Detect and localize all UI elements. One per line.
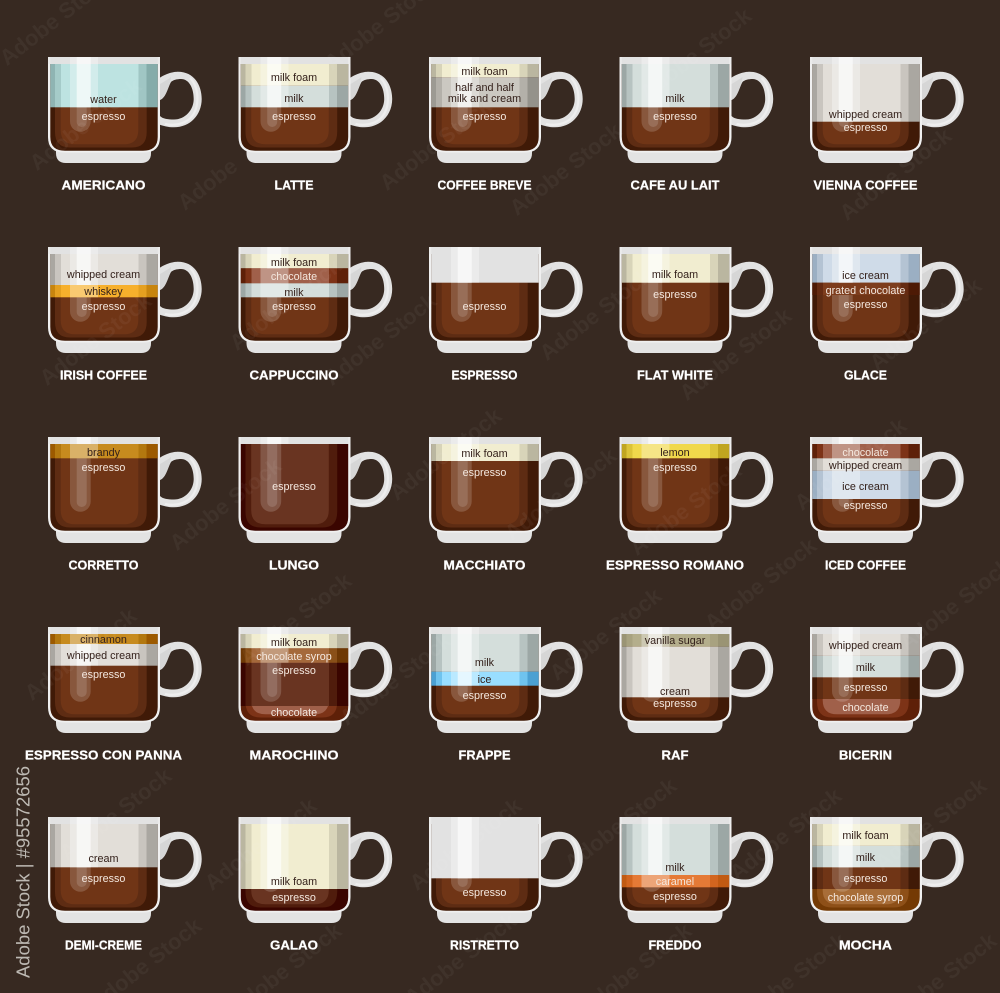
cup body	[238, 627, 392, 733]
drink: espresso	[429, 247, 583, 382]
drink: irish coffee	[48, 247, 202, 382]
stock watermarks: Adobe Stock	[55, 762, 177, 865]
stock watermarks: Adobe Stock	[375, 92, 497, 195]
stock watermarks: Adobe Stock	[385, 402, 507, 505]
layer labels: milk foam	[842, 830, 889, 842]
layer labels: chocolate	[271, 271, 317, 283]
layer labels: espresso	[463, 301, 506, 313]
glass highlight	[70, 437, 98, 458]
glass highlight	[260, 437, 288, 444]
drink: coffee breve	[429, 57, 583, 192]
cup body	[429, 817, 583, 923]
liquid layers	[431, 817, 539, 913]
drink: corretto	[48, 437, 202, 572]
liquid layers	[240, 247, 348, 343]
glass highlight	[451, 247, 479, 283]
layer labels: espresso	[272, 892, 316, 904]
layer labels: milk	[856, 662, 876, 674]
glass highlight	[832, 627, 860, 677]
layer labels: whipped cream	[828, 460, 902, 472]
layer labels: espresso	[844, 299, 887, 311]
layer labels: milk	[665, 93, 685, 105]
drink: frappe	[429, 627, 583, 762]
drink: ristretto	[429, 817, 583, 952]
glass highlight	[451, 57, 479, 107]
name: FRAPPE	[458, 748, 511, 762]
cup body	[238, 817, 392, 923]
name: GALAO	[270, 938, 318, 952]
stock watermarks: Adobe Stock	[500, 442, 622, 545]
glass highlight	[642, 247, 670, 283]
liquid layers	[240, 627, 348, 723]
drink: cafe au lait	[620, 57, 773, 192]
layer labels: brandy	[87, 447, 121, 459]
layer labels: chocolate	[271, 707, 317, 719]
name: GLACE	[844, 368, 887, 382]
layer labels: milk	[284, 93, 304, 105]
stock watermarks: Adobe Stock	[635, 2, 757, 105]
layer labels	[652, 269, 698, 301]
glass highlight	[70, 627, 98, 666]
layer labels: espresso	[653, 462, 697, 474]
glass highlight	[260, 627, 288, 663]
layer labels	[653, 447, 697, 474]
cup body	[48, 57, 202, 163]
layer labels	[271, 257, 317, 313]
layer labels	[82, 94, 125, 123]
layer labels: espresso	[653, 698, 697, 710]
layer labels	[461, 448, 508, 479]
stock watermarks: Adobe Stock	[790, 412, 912, 515]
name: ICED COFFEE	[825, 558, 906, 572]
layer labels: espresso	[844, 682, 887, 694]
cup body	[429, 627, 583, 733]
layer labels: chocolate syrop	[256, 651, 332, 663]
name: BICERIN	[839, 748, 892, 762]
layer labels: chocolate	[842, 447, 889, 459]
cup body	[238, 247, 392, 353]
layer labels: whipped cream	[66, 650, 140, 662]
layer labels: cream	[660, 686, 690, 698]
name: MACCHIATO	[444, 558, 526, 572]
layer labels: vanilla sugar	[645, 635, 706, 647]
liquid layers	[50, 247, 158, 343]
layer labels	[271, 72, 317, 123]
drink: demi-creme	[48, 817, 202, 952]
liquid layers	[240, 817, 348, 913]
layer labels: ice cream	[842, 270, 889, 282]
layer labels: espresso	[463, 111, 506, 123]
layer labels: espresso	[82, 873, 125, 885]
layer labels: lemon	[660, 447, 690, 459]
layer labels	[653, 93, 697, 123]
stock watermarks: Adobe Stock	[535, 262, 657, 365]
layer labels: half and half	[455, 82, 515, 94]
layer labels: caramel	[656, 876, 694, 888]
layer labels: espresso	[463, 690, 506, 702]
layer labels: espresso	[272, 111, 316, 123]
stock watermarks: Adobe Stock	[725, 782, 847, 885]
cup body	[429, 57, 583, 163]
liquid layers	[240, 57, 348, 153]
layer labels: milk foam	[271, 876, 317, 888]
layer labels	[463, 657, 506, 702]
name: ESPRESSO CON PANNA	[25, 748, 183, 762]
layer labels	[256, 637, 332, 719]
stock watermarks: Adobe Stock	[235, 567, 357, 670]
name: FLAT WHITE	[637, 368, 713, 382]
layer labels: milk foam	[271, 72, 317, 84]
stock watermarks: Adobe Stock	[225, 252, 347, 355]
layer labels: milk and cream	[448, 93, 521, 105]
stock watermarks: Adobe Stock	[320, 287, 442, 390]
drink: vienna coffee	[810, 57, 964, 192]
liquid layers	[622, 817, 730, 913]
layer labels: grated chocolate	[826, 285, 905, 297]
name: MAROCHINO	[250, 748, 339, 762]
name: LUNGO	[269, 558, 319, 572]
glass highlight	[642, 57, 670, 107]
cup body	[429, 437, 583, 543]
layer labels	[828, 447, 902, 512]
stock watermarks: Adobe Stock	[560, 772, 682, 875]
name: DEMI-CREME	[65, 938, 142, 952]
layer labels: espresso	[463, 467, 506, 479]
name: IRISH COFFEE	[60, 368, 147, 382]
layer labels	[82, 447, 125, 474]
layer labels: espresso	[82, 301, 125, 313]
layer labels	[66, 634, 140, 681]
stock watermarks: Adobe Stock	[25, 72, 147, 175]
layer labels: espresso	[844, 500, 887, 512]
cup body	[48, 437, 202, 543]
layer labels	[653, 862, 697, 903]
stock watermarks: Adobe Stock	[200, 792, 322, 895]
liquid layers	[50, 57, 158, 153]
cup body	[48, 817, 202, 923]
cup body	[810, 57, 964, 163]
name: CORRETTO	[68, 558, 138, 572]
glass highlight	[451, 817, 479, 878]
name: FREDDO	[648, 938, 702, 952]
layer labels: espresso	[272, 301, 316, 313]
liquid layers	[431, 247, 539, 343]
stock watermarks: Adobe Stock	[625, 457, 747, 560]
layer labels: milk	[284, 287, 304, 299]
drink: lungo	[238, 437, 392, 572]
layer labels: espresso	[82, 669, 125, 681]
liquid layers	[812, 817, 920, 913]
drink: espresso con panna	[25, 627, 202, 762]
stock watermarks: Adobe Stock	[20, 602, 142, 705]
liquid layers	[622, 437, 730, 533]
layer labels: espresso	[463, 887, 506, 899]
stock watermarks: Adobe Stock	[545, 582, 667, 685]
layer labels	[828, 830, 903, 904]
cup body	[810, 247, 964, 353]
name: RISTRETTO	[450, 938, 519, 952]
name: CAPPUCCINO	[250, 368, 338, 382]
cup body	[620, 247, 773, 353]
layer labels	[828, 109, 902, 134]
stock id, vertical: Adobe Stock | #95572656	[14, 766, 34, 978]
layer labels: water	[89, 94, 117, 106]
cup body	[810, 817, 964, 923]
glass highlight	[260, 817, 288, 889]
drink: galao	[238, 817, 392, 952]
liquid layers	[812, 437, 920, 533]
glass highlight	[832, 817, 860, 867]
drink: americano	[48, 57, 202, 192]
liquid layers	[622, 57, 730, 153]
layer labels: chocolate syrop	[828, 892, 903, 904]
layer labels: milk foam	[271, 637, 317, 649]
cup body	[238, 57, 392, 163]
cup body	[48, 627, 202, 733]
stock watermarks: Adobe Stock	[675, 302, 797, 405]
name: ESPRESSO ROMANO	[606, 558, 744, 572]
drink: mocha	[810, 817, 964, 952]
cup body	[620, 817, 773, 923]
layer labels: cream	[88, 853, 119, 865]
glass highlight	[260, 247, 288, 297]
liquid layers	[431, 57, 539, 153]
name: MOCHA	[839, 938, 893, 952]
stock watermarks: Adobe Stock	[835, 122, 957, 225]
drink: iced coffee	[810, 437, 964, 572]
layer labels: espresso	[653, 111, 697, 123]
layer labels: espresso	[272, 481, 316, 493]
layer labels: cinnamon	[80, 634, 127, 646]
liquid layers	[431, 437, 539, 533]
layer labels: chocolate	[842, 702, 889, 714]
glass highlight	[70, 817, 98, 867]
stock watermarks: Adobe Stock	[335, 627, 457, 730]
name: RAF	[662, 748, 689, 762]
stock watermarks: Adobe Stock	[505, 117, 627, 220]
glass highlight	[642, 437, 670, 458]
layer labels	[828, 640, 902, 714]
name: AMERICANO	[62, 178, 145, 192]
layer labels: whiskey	[83, 286, 123, 298]
layer labels	[66, 269, 140, 313]
drink: bicerin	[810, 627, 964, 762]
layer labels: whipped cream	[66, 269, 140, 281]
cup body	[620, 437, 773, 543]
glass highlight	[832, 247, 860, 283]
drink: raf	[620, 627, 773, 762]
liquid layers	[812, 57, 920, 153]
stock watermarks: Adobe	[173, 153, 242, 215]
layer labels	[448, 66, 521, 123]
layer labels: milk	[665, 862, 685, 874]
liquid layers	[240, 437, 348, 533]
name: LATTE	[274, 178, 314, 192]
layer labels	[82, 853, 125, 885]
name: COFFEE BREVE	[438, 178, 532, 192]
drink: glace	[810, 247, 964, 382]
stock watermarks: Adobe Stock	[35, 287, 157, 390]
layer labels: espresso	[82, 462, 125, 474]
glass highlight	[832, 57, 860, 122]
glass highlight	[260, 57, 288, 107]
liquid layers	[812, 247, 920, 343]
liquid layers	[622, 627, 730, 723]
glass highlight	[451, 627, 479, 686]
name: CAFE AU LAIT	[630, 178, 720, 192]
layer labels: espresso	[82, 111, 125, 123]
cup body	[620, 627, 773, 733]
liquid layers	[622, 247, 730, 343]
layer labels: espresso	[272, 665, 316, 677]
cup body	[429, 247, 583, 353]
layer labels: whipped cream	[828, 109, 902, 121]
layer labels: ice	[478, 674, 491, 686]
cup body	[620, 57, 773, 163]
drink: marochino	[238, 627, 392, 762]
layer labels	[645, 635, 706, 710]
layer labels: espresso	[844, 873, 887, 885]
layer labels: milk	[856, 852, 876, 864]
glass highlight	[642, 627, 670, 697]
cup body	[48, 247, 202, 353]
stock watermarks: Adobe Stock	[405, 792, 527, 895]
layer labels: espresso	[653, 891, 697, 903]
layer labels: milk	[475, 657, 495, 669]
stock watermarks: Adobe Stock	[870, 772, 992, 875]
layer labels: espresso	[844, 122, 887, 134]
liquid layers	[50, 437, 158, 533]
layer labels: espresso	[653, 289, 697, 301]
cup body	[810, 437, 964, 543]
cup body	[238, 437, 392, 543]
layer labels: ice cream	[842, 481, 889, 493]
drink: macchiato	[429, 437, 583, 572]
glass highlight	[70, 57, 98, 107]
layer labels: milk foam	[461, 448, 508, 460]
stock watermarks: Adobe Stock	[865, 272, 987, 375]
stock watermarks: Adobe Stock	[700, 532, 822, 635]
name: VIENNA COFFEE	[814, 178, 918, 192]
liquid layers	[431, 627, 539, 723]
drink: freddo	[620, 817, 773, 952]
glass highlight	[832, 437, 860, 499]
layer labels: milk foam	[461, 66, 508, 78]
liquid layers	[812, 627, 920, 723]
liquid layers	[50, 817, 158, 913]
glass highlight	[642, 817, 670, 887]
drink: espresso romano	[606, 437, 773, 572]
layer labels: whipped cream	[828, 640, 902, 652]
layer labels: milk foam	[652, 269, 698, 281]
stock watermarks: Adobe Stock	[165, 452, 287, 555]
drink: latte	[238, 57, 392, 192]
glass highlight	[451, 437, 479, 461]
layer labels	[271, 876, 317, 904]
layer labels	[826, 270, 905, 311]
drink: cappuccino	[238, 247, 392, 382]
glass highlight	[70, 247, 98, 297]
liquid layers	[50, 627, 158, 723]
cup body	[810, 627, 964, 733]
layer labels: milk foam	[271, 257, 317, 269]
drink: flat white	[620, 247, 773, 382]
name: ESPRESSO	[452, 368, 518, 382]
